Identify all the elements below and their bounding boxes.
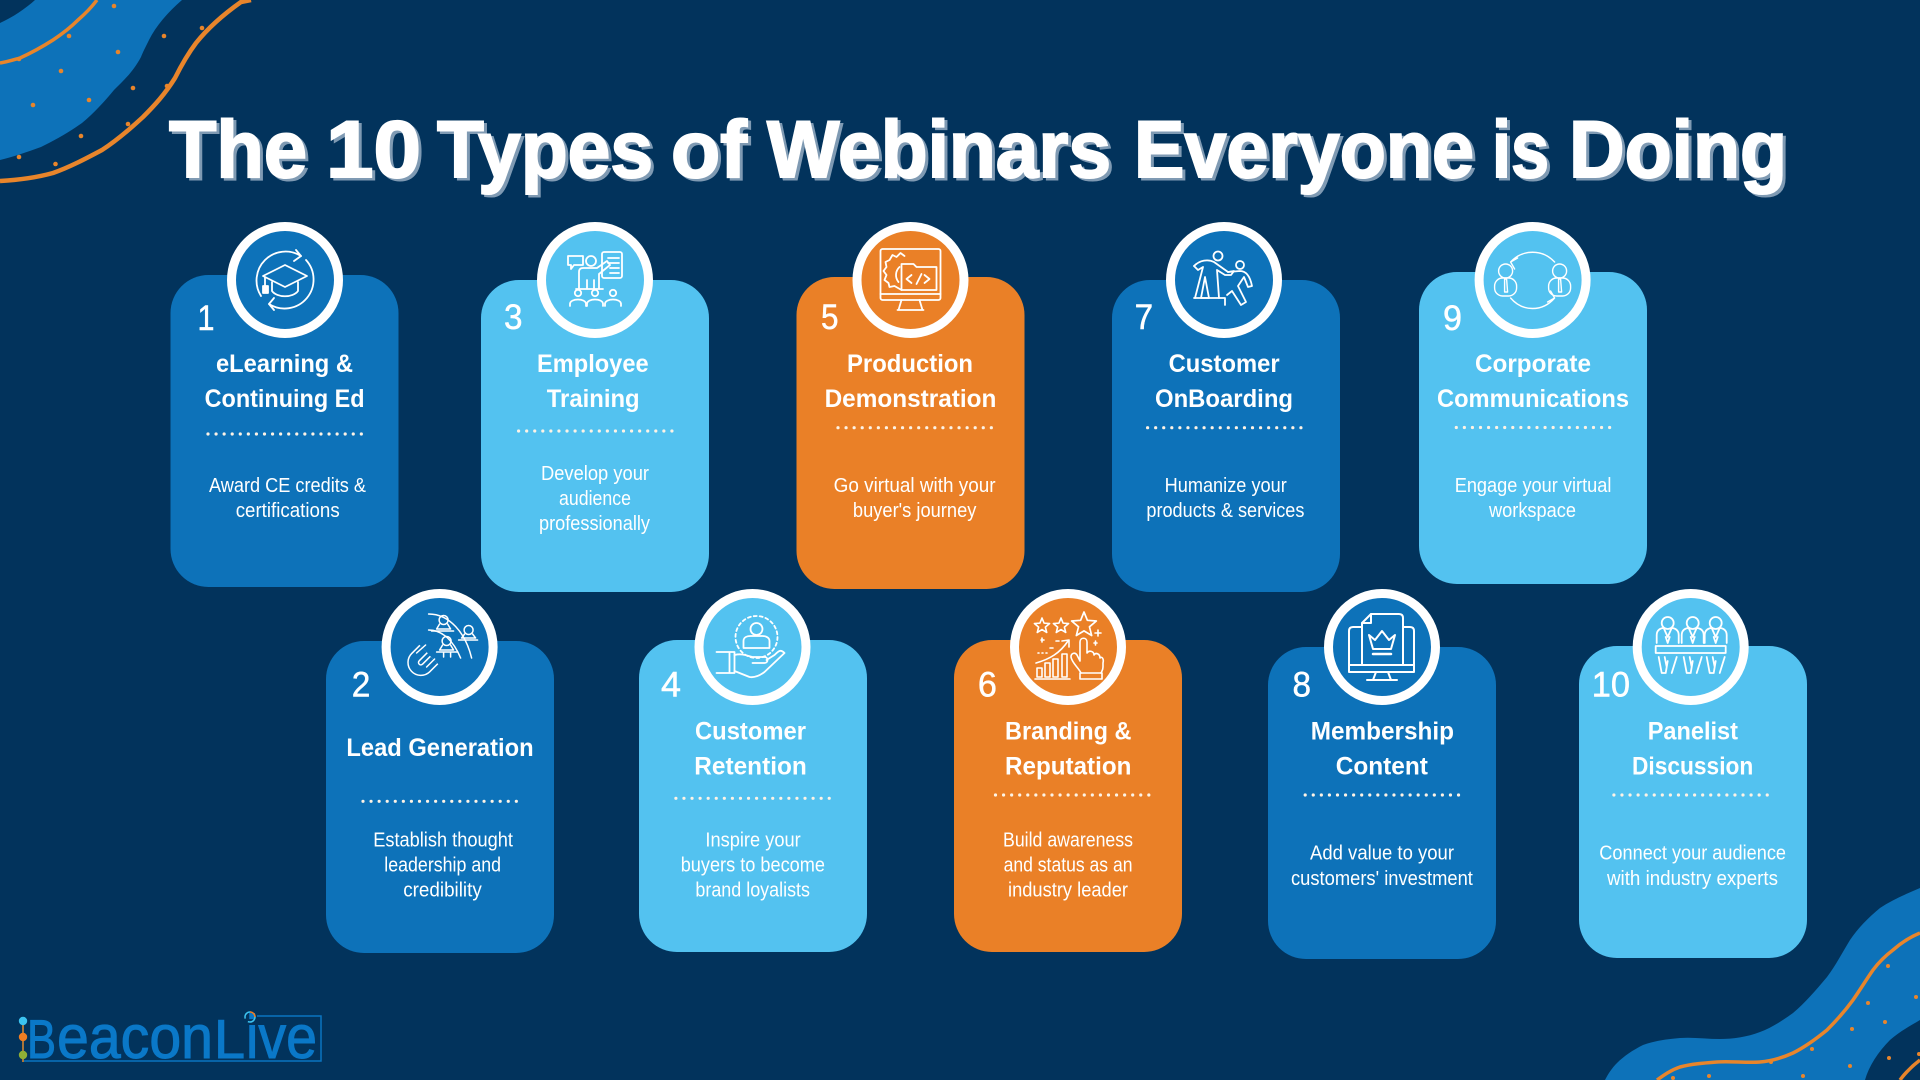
number 6: 6 — [978, 666, 997, 705]
heading: Employee Training: Employee — [537, 350, 649, 378]
heading: Panelist Discussion — [1632, 717, 1753, 780]
heading: Lead Generation: Lead Generation — [346, 734, 534, 762]
panel: card 5 Production Demonstration — [796, 226, 1024, 589]
title: The — [172, 108, 310, 198]
logo: BeaconLive: eacon — [57, 1003, 213, 1071]
description: workspace — [1488, 500, 1576, 522]
heading: Employee Training — [537, 350, 649, 413]
title — [169, 105, 1790, 198]
title: Doing — [1572, 108, 1790, 198]
heading: Branding & Reputation: Reputation — [1005, 752, 1131, 780]
description — [1599, 842, 1786, 890]
panel: card 10 Panelist Discussion — [1579, 594, 1807, 958]
description — [373, 830, 513, 902]
number 5: 5 — [821, 298, 838, 337]
description — [539, 463, 650, 535]
number 3: 3 — [504, 298, 522, 337]
heading: eLearning — [205, 350, 365, 413]
heading: Branding & Reputation: Branding & — [1005, 717, 1131, 745]
heading: Customer Retention — [694, 717, 807, 780]
title: 10 — [329, 108, 424, 198]
panel: card 7 Customer OnBoarding — [1112, 226, 1340, 592]
description: Go virtual with your — [834, 475, 996, 497]
title: Webinars — [767, 105, 1111, 195]
logo: BeaconLive — [19, 1003, 321, 1071]
description — [209, 475, 367, 522]
icon: hand holding person — [716, 616, 784, 677]
logo: BeaconLive: L — [214, 1008, 245, 1070]
description: Develop your — [541, 463, 649, 485]
heading: Employee Training: Training — [547, 385, 640, 413]
title: Doing — [1569, 105, 1787, 195]
description: Inspire your — [705, 830, 801, 852]
description — [1455, 475, 1611, 522]
number 1: 1 — [198, 299, 214, 338]
panel: card 3 Employee Training — [481, 226, 709, 592]
logo: BeaconLive: ive — [246, 1003, 317, 1071]
panel: card 9 Corporate Communications — [1419, 226, 1647, 584]
panel: card 1 eLearning — [170, 226, 398, 587]
icon: trainer and audience — [568, 252, 622, 306]
number 10: 10 — [1592, 666, 1630, 705]
panel: card 8 Membership Content — [1268, 594, 1496, 959]
title: 10 — [326, 105, 421, 195]
title: Everyone — [1137, 108, 1477, 198]
description — [681, 830, 825, 902]
number 2: 2 — [352, 666, 370, 705]
heading: Production Demonstration: Demonstration — [825, 385, 996, 413]
title: is — [1495, 108, 1552, 198]
description: leadership and — [384, 855, 501, 877]
heading: Panelist Discussion: Panelist — [1648, 717, 1739, 745]
description: professionally — [539, 513, 650, 535]
logo: BeaconLive: B — [27, 1008, 56, 1070]
panel: card 4 Customer Retention — [639, 594, 867, 952]
heading: Corporate Communications: Corporate — [1475, 350, 1591, 378]
description: credibility — [403, 880, 482, 902]
number 7: 7 — [1135, 298, 1153, 337]
panel: card 6 Branding & Reputation — [954, 594, 1182, 952]
heading: Customer OnBoarding: OnBoarding — [1155, 385, 1293, 413]
icon: monitor with gear and code folder — [880, 249, 940, 310]
heading: Customer Retention: Retention — [694, 752, 807, 780]
description: brand loyalists — [695, 880, 810, 902]
description: customers' investment — [1291, 868, 1473, 890]
heading: Corporate Communications — [1437, 350, 1629, 413]
panel: card 2 Lead Generation — [326, 594, 554, 953]
icon: monitor with crown document — [1349, 614, 1414, 680]
description — [834, 475, 996, 522]
description: Humanize your — [1165, 475, 1287, 497]
icon: stars, growth chart and pointing hand — [1034, 612, 1103, 679]
title: is — [1492, 105, 1549, 195]
icon: three panelists at table — [1656, 617, 1727, 673]
description: Award CE credits & — [209, 475, 367, 497]
heading: Membership Content — [1311, 717, 1454, 780]
title: of — [671, 105, 748, 195]
decoration: bottom-right wave — [1605, 888, 1920, 1080]
description — [1291, 842, 1473, 890]
heading: Production Demonstration — [825, 350, 996, 413]
description: Add value to your — [1310, 842, 1454, 864]
heading: eLearning: Continuing Ed — [205, 385, 365, 413]
heading: Production Demonstration: Production — [847, 350, 973, 378]
description: Establish thought — [373, 830, 513, 852]
description — [1146, 475, 1304, 522]
description: industry leader — [1008, 880, 1128, 902]
description: audience — [559, 488, 631, 510]
title: Everyone — [1134, 105, 1474, 195]
heading: Membership Content: Content — [1336, 752, 1429, 780]
number 8: 8 — [1292, 666, 1311, 705]
heading: Customer OnBoarding — [1155, 350, 1293, 413]
heading: Customer OnBoarding: Customer — [1169, 350, 1280, 378]
icon: two people exchanging — [1495, 252, 1571, 308]
title: The — [169, 105, 307, 195]
number 9: 9 — [1443, 299, 1462, 338]
heading: Branding & Reputation — [1005, 717, 1131, 780]
description: Connect your audience — [1599, 842, 1786, 864]
icon: person helping another climb — [1194, 252, 1252, 305]
description: certifications — [236, 500, 340, 522]
title: of — [674, 108, 751, 198]
heading: eLearning: eLearning & — [216, 350, 353, 378]
title: Types — [440, 108, 656, 198]
decoration: top-left wave — [0, 0, 251, 181]
description: Engage your virtual — [1455, 475, 1611, 497]
description: and status as an — [1004, 855, 1132, 877]
heading: Customer Retention: Customer — [695, 717, 806, 745]
icon: magnet attracting people — [413, 614, 478, 670]
description: buyers to become — [681, 855, 825, 877]
heading: Panelist Discussion: Discussion — [1632, 752, 1753, 780]
heading: Membership Content: Membership — [1311, 717, 1454, 745]
description: products & services — [1146, 500, 1304, 522]
description — [1003, 830, 1133, 902]
title: Types — [437, 105, 653, 195]
heading: Corporate Communications: Communications — [1437, 385, 1629, 413]
description: Build awareness — [1003, 830, 1133, 852]
description: buyer's journey — [853, 500, 976, 522]
icon: graduation cap with arrows — [257, 250, 314, 310]
description: with industry experts — [1606, 868, 1778, 890]
number 4: 4 — [661, 666, 681, 705]
title: Webinars — [770, 108, 1114, 198]
